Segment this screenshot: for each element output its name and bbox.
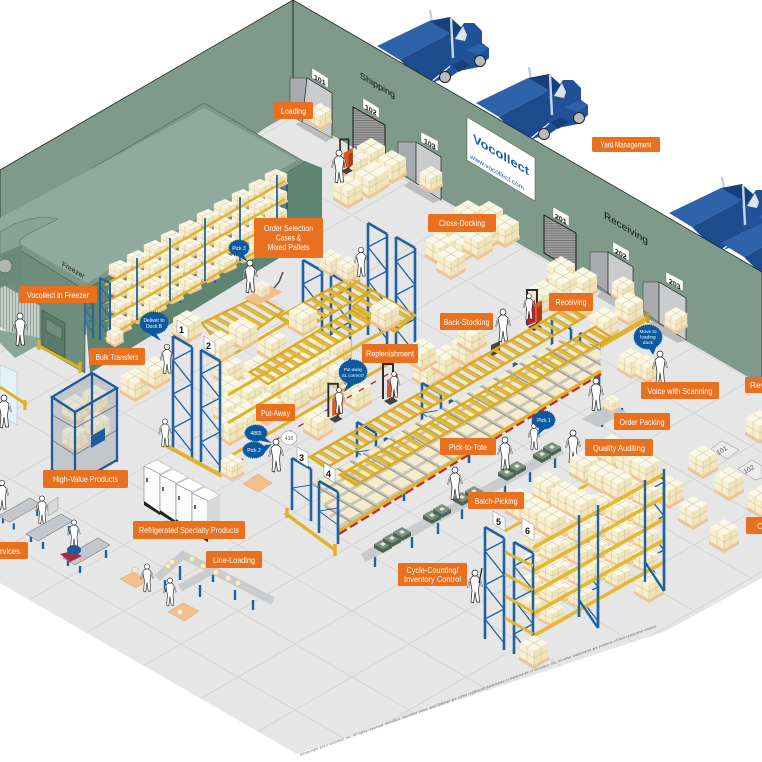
back walls: [0, 0, 762, 386]
label: Batch-Picking: [468, 492, 524, 509]
rack signs 3 and 4: 3: [299, 453, 304, 463]
freezer person: [13, 313, 27, 346]
label: Returns (cropped): [745, 377, 762, 393]
bubble: pick 1: Pick 1: [537, 418, 551, 424]
bubble: move to loading dock: [634, 325, 662, 355]
label: Replenishment: [362, 344, 418, 363]
label: Cross-Docking: Cross-Docking: [439, 218, 485, 228]
order selection pallet jack: [243, 260, 283, 305]
label: Put-Away: [256, 404, 295, 421]
bubble: move to loading dock: Move to: [639, 329, 657, 335]
outbound pallets: [678, 410, 762, 553]
label: Receiving: Receiving: [556, 297, 587, 307]
rack 5 and 6 signs: 6: [525, 526, 530, 536]
rack number signs: 1: [179, 325, 184, 335]
bubble: 438: [281, 431, 297, 445]
label: High-Value Products: High-Value Products: [53, 474, 118, 484]
label: Services: rvices: [0, 546, 20, 556]
cycle counting worker: [468, 568, 482, 603]
floor placards: 101: [716, 445, 729, 457]
label: Voice with Scanning: Voice with Scanning: [648, 386, 713, 396]
orange labels: [0, 102, 762, 586]
bubble: 4865: [245, 425, 272, 443]
label: Refrigerated Specialty Products: [133, 521, 245, 539]
label: Quality Auditing: Quality Auditing: [593, 443, 645, 453]
label: Vocollect in Freezer: [19, 286, 97, 303]
pallet with worker top: [319, 247, 367, 283]
door number signs: 201: [555, 212, 567, 227]
label: Bulk Transfers: [89, 348, 145, 365]
label: Receiving: [549, 293, 593, 311]
label: Quality Auditing: [585, 439, 653, 456]
receiving wall text: Receiving: [604, 210, 648, 247]
bubble: put-away correct: SL correct?: [342, 373, 365, 378]
rack signs 3 and 4: [297, 447, 335, 483]
yellow dock bumper: [39, 340, 80, 373]
label: Refrigerated Specialty Products: Refrigerated Specialty Products: [139, 525, 239, 535]
label: Yard Management: Yard Management: [600, 140, 652, 150]
door number signs: 103: [424, 137, 436, 152]
bubble: put-away correct: [339, 360, 367, 392]
label: Order Selection: Mixed Pallets: [268, 242, 310, 252]
bubble: pick 3: [229, 240, 249, 262]
door number signs: 101: [314, 73, 326, 88]
door number signs: 203: [669, 277, 681, 292]
label: Order Packing: [614, 413, 670, 430]
door number signs: [312, 68, 683, 292]
bulk transfer pallet: [120, 344, 173, 447]
put-away worker: [243, 439, 283, 492]
high-value cage: [52, 373, 117, 485]
label: Replenishment: Replenishment: [366, 348, 415, 358]
label: Line-Loading: [206, 551, 262, 568]
bubble: pick 1: [533, 411, 555, 435]
bubble: pick 2: [243, 442, 272, 458]
label: Back-Stocking: Back-Stocking: [444, 317, 490, 327]
label: Pick-to-Tote: [440, 438, 496, 455]
services tables: [0, 480, 110, 573]
bubble: 4865: 4865: [250, 431, 262, 437]
label: Vocollect in Freezer: Vocollect in Freezer: [27, 290, 89, 300]
label: Order Selection: Order Selection: [264, 223, 313, 233]
label: Cycle-Counting: Inventory Control: [404, 574, 461, 584]
label: Cycle-Counting: [398, 563, 467, 586]
rack 5 and 6 signs: [493, 511, 534, 541]
label: High-Value Products: [43, 470, 128, 488]
door number signs: 102: [365, 103, 377, 118]
back-stocking group: [412, 309, 510, 389]
order packing table: [582, 378, 626, 427]
dock doors: [290, 78, 688, 343]
label: Batch-Picking: Batch-Picking: [474, 496, 518, 506]
freezer racking: [85, 169, 288, 347]
shipping wall text: Shipping: [360, 71, 395, 101]
label: Back-Stocking: [440, 313, 493, 330]
replenishment forklift: [383, 364, 400, 405]
rack number signs: [177, 320, 215, 356]
label: Voice with Scanning: [641, 382, 719, 399]
label: Line-Loading: Line-Loading: [213, 555, 255, 565]
label: Put-Away: Put-Away: [261, 408, 291, 418]
label: Order Selection: [254, 218, 323, 258]
floor placards: 102: [743, 464, 756, 476]
label: Cycle-Counting: Cycle-Counting/: [406, 565, 459, 575]
floor placards: [711, 441, 762, 480]
rack 3-4 flow rack: [285, 307, 611, 556]
bubble: pick 2: Pick 2: [247, 448, 261, 454]
label: Loading: Loading: [281, 106, 306, 116]
callout bubbles: [140, 240, 662, 458]
receiving pallets and forklift: [523, 256, 598, 331]
rack signs 3 and 4: 4: [326, 469, 331, 479]
batch-picking conveyor: [363, 424, 580, 567]
door number signs: 202: [615, 247, 627, 262]
bubble: put-away correct: Put-away: [344, 367, 363, 372]
bubble: deliver to dock B: Dock B: [146, 324, 163, 330]
label: Pick-to-Tote: Pick-to-Tote: [449, 442, 487, 452]
label: Order Selection: Cases &: [276, 232, 301, 242]
Vocollect sign: www.vocollect.com: [469, 153, 524, 192]
label: cropped right: [746, 517, 762, 534]
put-away forklift and pallet: [303, 384, 345, 441]
bubble: deliver to dock B: Deliver to: [143, 318, 165, 324]
voice with scanning jack: [618, 348, 667, 384]
trucks in yard: [377, 10, 762, 280]
duct unit: [0, 217, 58, 288]
line-loading conveyor: [120, 555, 273, 621]
Vocollect sign: [467, 117, 535, 201]
label: Cross-Docking: [428, 214, 496, 232]
Vocollect sign: Vocollect: [473, 131, 530, 179]
label: Order Packing: Order Packing: [620, 417, 665, 427]
bubble: pick 3: Pick 3: [232, 246, 246, 252]
label: Loading: [274, 102, 313, 119]
glass room: [0, 365, 27, 428]
bubble: move to loading dock: dock: [643, 340, 654, 346]
shipping pallets and forklift: [332, 138, 407, 209]
rack 1-2 flow rack: [165, 223, 437, 481]
label: Yard Management: [592, 137, 660, 152]
rack 5 and 6 signs: 5: [496, 517, 501, 527]
bubble: move to loading dock: loading: [640, 334, 656, 340]
rack number signs: 2: [206, 341, 211, 351]
freezer building: [0, 103, 322, 373]
copyright line: ©Copyright 2010 Vocollect, Inc. All rights reserved. Vocollect, Vocollect Voice, and Talkman are either registered trademarks or trademarks of Vocollect, Inc. All other trademarks are property of their respective owners.: [300, 624, 657, 757]
label: Services: [0, 542, 28, 559]
yellow lane with loads near door 202: [589, 292, 648, 346]
quality auditing rack: [485, 434, 684, 669]
label: Bulk Transfers: Bulk Transfers: [96, 352, 138, 362]
bubble: 438: 438: [285, 436, 293, 442]
bubble: deliver to dock B: [140, 312, 168, 341]
refrigerated units: [144, 460, 220, 542]
freezer label: Freezer: [62, 259, 85, 281]
cross-docking pallets: [425, 200, 520, 280]
